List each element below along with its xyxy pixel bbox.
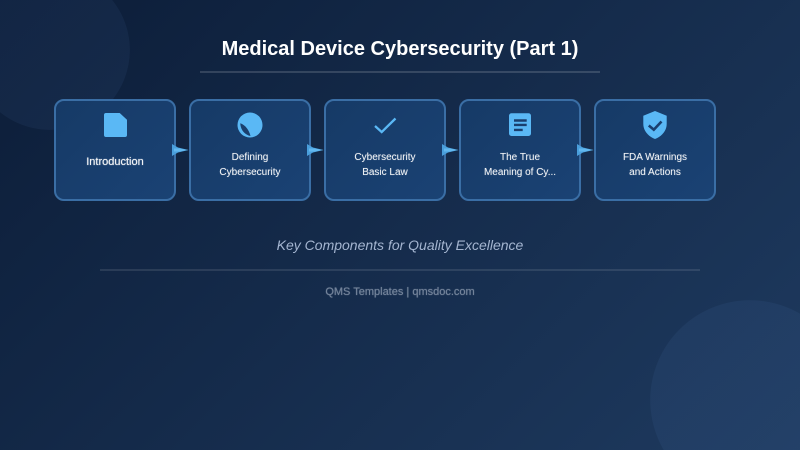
label: Defining Cybersecurity (219, 152, 281, 178)
label: The True Meaning of Cy...: The True (500, 152, 540, 163)
panel: Introduction (54, 99, 176, 201)
icon: globe circle (238, 112, 262, 138)
panel: Defining Cybersecurity (189, 99, 311, 201)
icon: shield check (643, 111, 667, 139)
icon: check mark (374, 118, 396, 134)
arrow 2 (307, 144, 324, 156)
panel: FDA Warnings and Actions (594, 99, 716, 201)
label: Defining Cybersecurity: Cybersecurity (219, 167, 281, 178)
label: Cybersecurity Basic Law: Cybersecurity (354, 152, 416, 163)
label: The True Meaning of Cy... (484, 152, 556, 178)
decorative circle: top left (0, 0, 130, 130)
title: Medical Device Cybersecurity (Part 1) (222, 38, 578, 60)
label: FDA Warnings and Actions: FDA Warnings (623, 152, 687, 163)
icon: document (104, 113, 127, 137)
panel: The True Meaning of Cy... (459, 99, 581, 201)
panel: Cybersecurity Basic Law (324, 99, 446, 201)
subtitle: Key Components for Quality Excellence (277, 237, 523, 253)
arrow 3 (442, 144, 458, 156)
label: Introduction: Introduction (86, 156, 144, 168)
footer: QMS Templates | qmsdoc.com (325, 286, 475, 298)
icon: text document (509, 113, 531, 136)
label: FDA Warnings and Actions (623, 152, 687, 178)
arrow 1 (172, 144, 188, 156)
label: Defining Cybersecurity: Defining (232, 152, 268, 163)
label: Cybersecurity Basic Law (354, 152, 416, 178)
arrow 4 (577, 144, 594, 156)
label: FDA Warnings and Actions: and Actions (629, 167, 681, 178)
label: The True Meaning of Cy...: Meaning of Cy... (484, 167, 556, 178)
decorative circle: bottom right (650, 300, 800, 450)
label: Cybersecurity Basic Law: Basic Law (362, 167, 408, 178)
